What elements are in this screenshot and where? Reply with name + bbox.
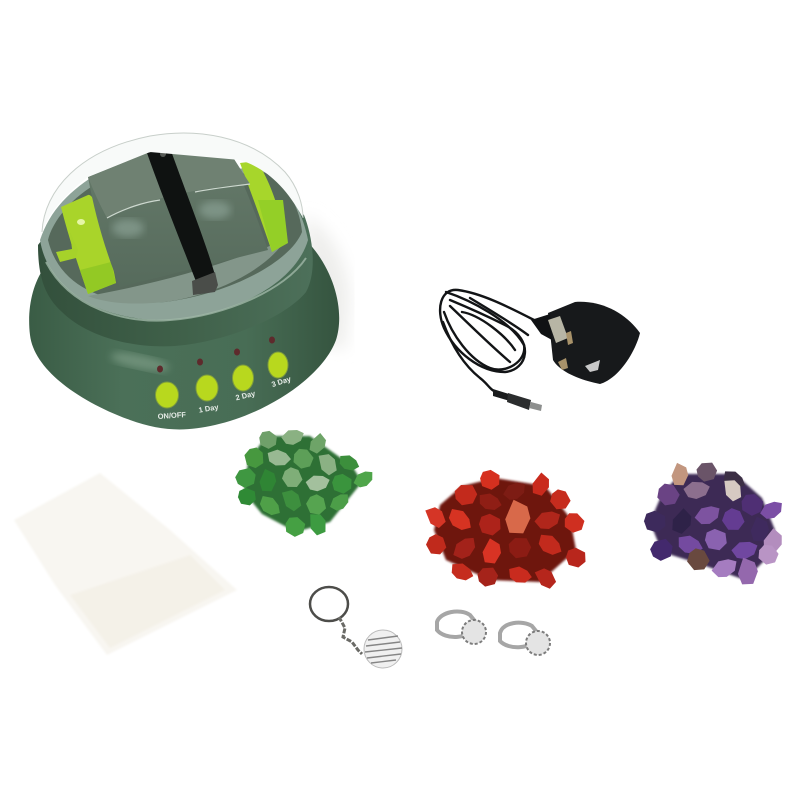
grey drum [88, 148, 268, 287]
button: 3 day [268, 352, 288, 378]
purple rocks [642, 459, 787, 587]
ring 1 [437, 611, 486, 644]
lower floor [88, 240, 285, 304]
plug body [531, 302, 640, 384]
LED: 1 day [197, 358, 203, 366]
key ring [310, 587, 348, 621]
right green wheel [240, 161, 288, 252]
button: 2 day [232, 365, 254, 391]
bead cage [364, 630, 402, 668]
base highlight [109, 349, 171, 375]
LED: 2 day [234, 348, 240, 356]
dome glass lower band [40, 168, 308, 320]
label: 1 day: 1 Day [198, 402, 220, 415]
label: 3 day: 3 Day [270, 374, 293, 389]
cable coil [440, 290, 534, 392]
clear dome [42, 133, 303, 232]
label: 2 day: 2 Day [235, 389, 257, 402]
chain [339, 617, 362, 654]
LED: on/off [157, 366, 163, 372]
drum highlights [107, 184, 250, 218]
dome outline [42, 133, 303, 232]
black strap [147, 148, 218, 295]
DC jack [493, 389, 542, 411]
red rocks [423, 468, 588, 592]
ring 2 [500, 623, 550, 655]
button: 1 day [196, 375, 218, 401]
keyring with bead cage [310, 587, 402, 668]
powder bag [14, 473, 237, 655]
collar band [38, 173, 313, 346]
collar highlight [46, 258, 306, 321]
tumbler machine [29, 133, 350, 429]
label: on/off: ON/OFF [157, 410, 187, 421]
machine shadow [305, 215, 350, 350]
green rocks [232, 427, 377, 539]
LED: 3 day [269, 336, 275, 344]
button: on/off [156, 382, 178, 408]
dome interior floor [48, 172, 302, 303]
power adapter [440, 290, 640, 411]
machine base [29, 240, 339, 429]
left green wheel [56, 195, 116, 294]
